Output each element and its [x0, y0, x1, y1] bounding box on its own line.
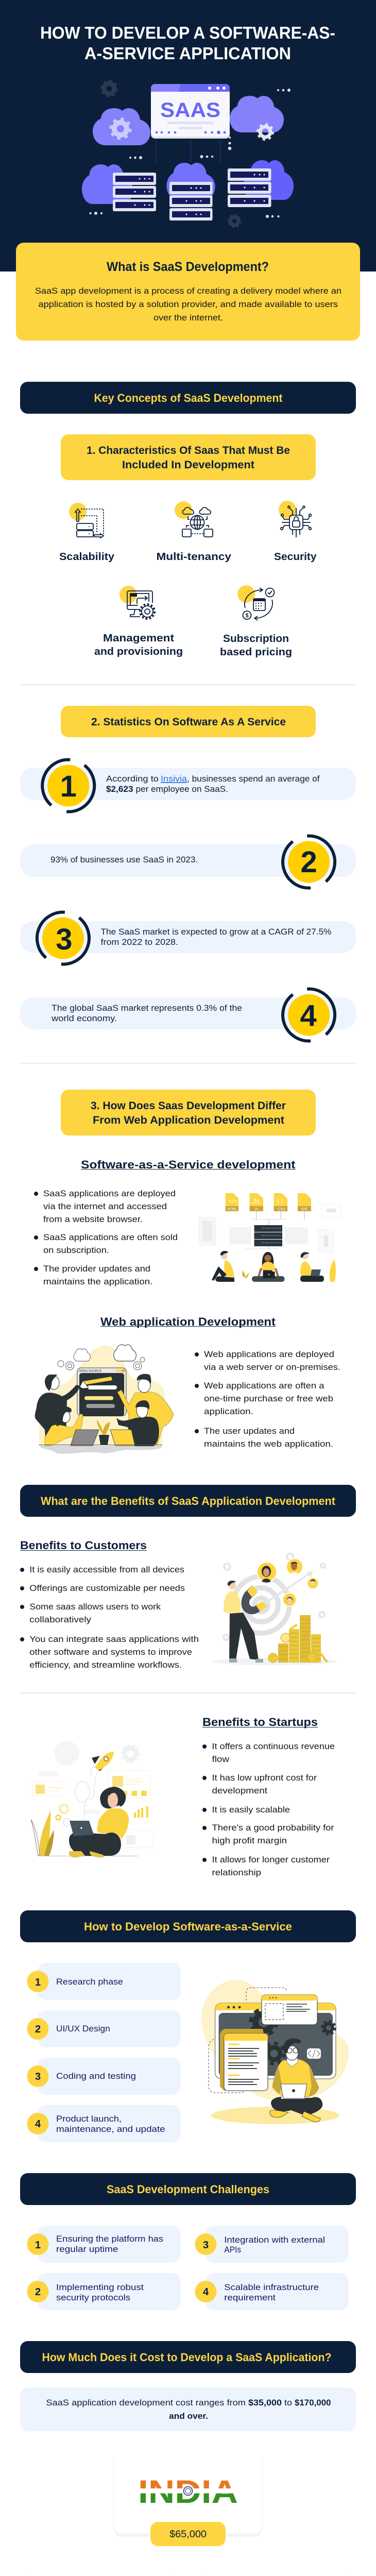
- challenge 1: 1: [35, 2240, 41, 2251]
- list: web application bullets: via a web server or on-premises.: [204, 1362, 340, 1372]
- step card 4: 4: [35, 2119, 41, 2130]
- SaaS browser window: [151, 84, 230, 139]
- badge 1: [42, 759, 94, 812]
- laptops and plant: [39, 1419, 162, 1446]
- code file icons: </>: [229, 1198, 237, 1205]
- heading: benefits: [20, 1485, 356, 1517]
- label: management and provisioning: [94, 633, 183, 657]
- card: United Kingdom: [202, 2567, 352, 2576]
- step card 1: [27, 1963, 180, 2000]
- list: web application bullets: maintains the web application.: [204, 1439, 333, 1449]
- list: customer benefits: [20, 1565, 199, 1670]
- challenge 1: [27, 2226, 180, 2263]
- person yellow sweater: [117, 1374, 174, 1445]
- step card 3: [27, 2058, 180, 2095]
- label: security: Security: [274, 551, 317, 563]
- list: SaaS bullets: The provider updates and: [43, 1264, 150, 1274]
- subheading: software-as-a-service development: Software-as-a-Service development: [81, 1158, 296, 1171]
- person yellow front left: [45, 1406, 83, 1446]
- definition text: SaaS app development is a process of creating a delivery model where an: [35, 286, 341, 296]
- code file icons: GIF: [301, 1208, 307, 1211]
- stat text: The global SaaS market represents 0.3% of the: [52, 1003, 242, 1013]
- stat 2: [20, 836, 356, 888]
- header background: [0, 0, 376, 272]
- stat text: per employee on SaaS.: [136, 784, 228, 794]
- person right: [300, 1252, 336, 1282]
- target rings: [233, 1577, 289, 1633]
- stat 4: [20, 989, 356, 1041]
- step card 4: [27, 2105, 180, 2142]
- challenge 2: 2: [35, 2286, 41, 2298]
- list: customer benefits: Offerings are customizable per needs: [29, 1583, 185, 1593]
- challenge 2: security protocols: [56, 2293, 130, 2302]
- illustration: SaaS team around a server: [199, 1193, 341, 1282]
- list: startup benefits: [202, 1741, 335, 1877]
- outline clouds and gears: [58, 1345, 145, 1370]
- challenge 3: Integration with external: [224, 2235, 325, 2245]
- stat text: [101, 927, 332, 947]
- customer avatars: [257, 1558, 318, 1606]
- challenge 2: Implementing robust: [56, 2282, 144, 2292]
- lower clouds: [82, 160, 294, 204]
- card: India: $65,000: [169, 2529, 207, 2540]
- title: [40, 23, 335, 63]
- label: management and provisioning: Management: [103, 633, 174, 644]
- server stack right: [228, 168, 271, 207]
- heading: statistics: 2. Statistics On Software As A Service: [91, 716, 286, 728]
- label: multi-tenancy: Multi-tenancy: [157, 551, 232, 563]
- step card 4: Product launch,: [56, 2114, 122, 2124]
- heading: characteristics: Included In Development: [122, 459, 254, 471]
- heading: What is SaaS Development?: [107, 260, 269, 274]
- person dark sweater: [35, 1375, 89, 1437]
- list: SaaS bullets: [34, 1189, 178, 1286]
- stat text: Insivia: [161, 774, 187, 784]
- server stack middle: [169, 182, 212, 221]
- challenge 4: 4: [203, 2286, 209, 2298]
- icon: dark gears: [101, 81, 241, 227]
- code file icons: [226, 1193, 311, 1211]
- panel: cost range: $35,000: [248, 2398, 282, 2408]
- list: SaaS bullets: on subscription.: [43, 1245, 109, 1255]
- list: customer benefits: other software and systems to improve: [29, 1647, 192, 1657]
- ghost clock and gears: [38, 1741, 139, 1814]
- ghost gears: [224, 1554, 325, 1640]
- challenge 2: [27, 2273, 180, 2310]
- heading: key concepts: Key Concepts of SaaS Development: [94, 392, 283, 404]
- list: web application bullets: Web applications are deployed: [204, 1349, 334, 1359]
- label: management and provisioning: and provisioning: [94, 646, 183, 657]
- stat text: world economy.: [51, 1013, 117, 1023]
- heading: challenges: [20, 2173, 356, 2205]
- man with magnet: [224, 1581, 267, 1663]
- label: subscription based pricing: Subscription: [223, 633, 289, 645]
- title: A-SERVICE APPLICATION: [84, 44, 291, 63]
- title: HOW TO DEVELOP A SOFTWARE-AS-: [40, 23, 335, 42]
- person left: [212, 1251, 234, 1282]
- stat 1: [20, 759, 356, 812]
- cloud upper right with gear: [230, 96, 284, 140]
- code file icons: CSS: [278, 1208, 285, 1211]
- step card 3: Coding and testing: [56, 2071, 136, 2081]
- list: startup benefits: There's a good probability for: [212, 1823, 334, 1833]
- label: subscription based pricing: [220, 633, 292, 658]
- founder: [38, 1787, 138, 1858]
- subheading: benefits to startups: Benefits to Startups: [202, 1716, 318, 1728]
- heading: characteristics: [61, 434, 316, 480]
- step card 3: 3: [35, 2071, 41, 2082]
- heading: how to develop: [20, 1910, 356, 1942]
- dashboards: [32, 1770, 153, 1848]
- blob and table shadow: [39, 1346, 165, 1445]
- list: startup benefits: It offers a continuous revenue: [212, 1741, 335, 1751]
- challenge 4: requirement: [224, 2293, 276, 2302]
- SaaS browser window: SAAS: [160, 99, 220, 122]
- list: customer benefits: collaboratively: [29, 1615, 92, 1624]
- icon: management and provisioning: [119, 586, 155, 619]
- stat text: from 2022 to 2028.: [101, 937, 178, 947]
- document: [220, 2029, 268, 2091]
- card: India: INDIA: [138, 2474, 238, 2510]
- list: startup benefits: relationship: [212, 1868, 261, 1877]
- stat text: $2,623: [106, 784, 133, 794]
- list: startup benefits: It has low upfront cost for: [212, 1773, 317, 1783]
- list: web application bullets: application.: [204, 1406, 253, 1416]
- hero illustration: SaaS clouds and servers: [82, 81, 294, 227]
- small window: [262, 1995, 317, 2025]
- panel: what is SaaS development: [16, 243, 360, 341]
- stat text: 93% of businesses use SaaS in 2023.: [50, 855, 198, 865]
- list: customer benefits: Some saas allows users to work: [29, 1602, 161, 1612]
- challenge 3: 3: [203, 2240, 209, 2251]
- list: startup benefits: high profit margin: [212, 1836, 287, 1845]
- code file icons: Js: [254, 1208, 259, 1211]
- heading: cost: How Much Does it Cost to Develop a SaaS Application?: [42, 2351, 332, 2364]
- definition text: [35, 286, 341, 323]
- illustration: customer magnet and coins: [211, 1554, 337, 1665]
- icon: scalability: [69, 503, 104, 538]
- list: web application bullets: one-time purchase or free web: [204, 1394, 333, 1403]
- stat text: [51, 1003, 242, 1023]
- panel: cost range: $170,000: [295, 2398, 331, 2408]
- step card 2: [27, 2010, 180, 2047]
- heading: cost: [20, 2341, 356, 2373]
- definition text: over the internet.: [153, 313, 223, 323]
- main window: [215, 2003, 336, 2079]
- plant: [242, 1270, 249, 1279]
- illustration: team at open source board: [35, 1345, 174, 1454]
- badge 1: 1: [60, 770, 77, 803]
- panel: cost range: SaaS application development cost ranges from: [46, 2398, 246, 2408]
- person dark jacket front: [116, 1400, 159, 1446]
- list: SaaS bullets: maintains the application.: [43, 1277, 152, 1286]
- icon: subscription pricing: $: [245, 613, 249, 619]
- code file icons: HTML: [227, 1208, 237, 1211]
- panel: cost range: and over.: [169, 2411, 208, 2421]
- server stack left: [113, 173, 156, 211]
- card: USA: [24, 2567, 174, 2576]
- ghost panels: [199, 1205, 341, 1252]
- challenge 1: Ensuring the platform has: [56, 2234, 163, 2244]
- rocket with dashed trail: [75, 1752, 114, 1834]
- list: web application bullets: Web applications are often a: [204, 1381, 324, 1391]
- step card 2: UI/UX Design: [56, 2024, 110, 2033]
- heading: benefits: What are the Benefits of SaaS Application Development: [41, 1495, 336, 1507]
- coin stacks: [268, 1615, 328, 1663]
- challenge 4: Scalable infrastructure: [224, 2282, 319, 2292]
- heading: statistics: [61, 706, 316, 737]
- dashed outlines: [209, 1988, 287, 2093]
- challenge 1: regular uptime: [56, 2244, 118, 2254]
- heading: challenges: SaaS Development Challenges: [107, 2183, 269, 2196]
- list: customer benefits: It is easily accessible from all devices: [29, 1565, 184, 1574]
- icon: security: [279, 501, 311, 537]
- list: SaaS bullets: via the internet and accessed: [43, 1201, 167, 1211]
- dotted connectors: [156, 140, 220, 162]
- challenge 4: [195, 2273, 348, 2310]
- list: startup benefits: It is easily scalable: [212, 1805, 290, 1815]
- card: India: [113, 2452, 263, 2546]
- stat text: According to: [106, 774, 159, 784]
- badge 4: [283, 989, 335, 1041]
- plant: [31, 1810, 54, 1856]
- heading: SaaS vs web application: [61, 1090, 316, 1136]
- person middle: [252, 1252, 284, 1282]
- heading: how to develop: How to Develop Software-as-a-Service: [84, 1920, 292, 1933]
- step card 1: Research phase: [56, 1977, 123, 1987]
- stat text: [106, 774, 320, 794]
- stat text: The SaaS market is expected to grow at a CAGR of 27.5%: [101, 927, 332, 937]
- challenge 3: [195, 2226, 348, 2263]
- step card 2: 2: [35, 2024, 41, 2035]
- panel: cost range: to: [284, 2398, 292, 2408]
- badge 3: 3: [56, 923, 73, 956]
- code file icons: { }: [277, 1197, 283, 1205]
- code board: OPEN SOURCE: [79, 1370, 101, 1373]
- stat text: , businesses spend an average of: [187, 774, 320, 784]
- small dots: [90, 89, 290, 218]
- blob and ground: [201, 1980, 349, 2100]
- illustration: startup founder with rocket: [31, 1741, 153, 1858]
- step card 4: maintenance, and update: [56, 2124, 165, 2134]
- heading: SaaS vs web application: From Web Application Development: [93, 1114, 284, 1126]
- challenge 3: APIs: [224, 2245, 241, 2255]
- heading: SaaS vs web application: 3. How Does Saas Development Differ: [91, 1100, 286, 1112]
- developer: [270, 2039, 322, 2122]
- panel: cost range: [20, 2387, 356, 2431]
- label: subscription based pricing: based pricing: [220, 647, 292, 658]
- subheading: benefits to customers: Benefits to Customers: [20, 1539, 147, 1552]
- list: customer benefits: efficiency, and streamline workflows.: [29, 1660, 182, 1670]
- code badge: [307, 2048, 321, 2059]
- badge 2: 2: [300, 845, 317, 879]
- label: scalability: Scalability: [59, 551, 115, 563]
- heading: characteristics: 1. Characteristics Of Saas That Must Be: [87, 445, 290, 456]
- list: startup benefits: flow: [212, 1754, 230, 1764]
- list: startup benefits: It allows for longer customer: [212, 1855, 330, 1865]
- list: customer benefits: You can integrate saas applications with: [29, 1634, 199, 1644]
- cloud upper left with gear: [93, 108, 150, 145]
- list: web application bullets: [195, 1349, 340, 1449]
- list: startup benefits: development: [212, 1786, 267, 1795]
- icon: multi-tenancy: [175, 501, 213, 537]
- list: SaaS bullets: from a website browser.: [43, 1214, 143, 1224]
- illustration: developer with windows: [201, 1980, 349, 2124]
- badge 3: [37, 912, 89, 964]
- icon: subscription pricing: [237, 585, 274, 620]
- stat 3: [20, 912, 356, 964]
- server rack: [254, 1225, 282, 1246]
- badge 4: 4: [300, 999, 317, 1032]
- heading: key concepts: [20, 382, 356, 414]
- code file icons: Js: [252, 1197, 260, 1205]
- list: SaaS bullets: SaaS applications are deployed: [43, 1189, 176, 1198]
- definition text: application is hosted by a solution provider, and made available to users: [38, 299, 338, 309]
- subheading: web application development: Web application Development: [100, 1315, 276, 1328]
- badge 2: [283, 836, 335, 888]
- code board: [77, 1368, 126, 1416]
- step card 1: 1: [35, 1977, 41, 1988]
- list: SaaS bullets: SaaS applications are often sold: [43, 1232, 178, 1242]
- list: web application bullets: The user updates and: [204, 1426, 295, 1436]
